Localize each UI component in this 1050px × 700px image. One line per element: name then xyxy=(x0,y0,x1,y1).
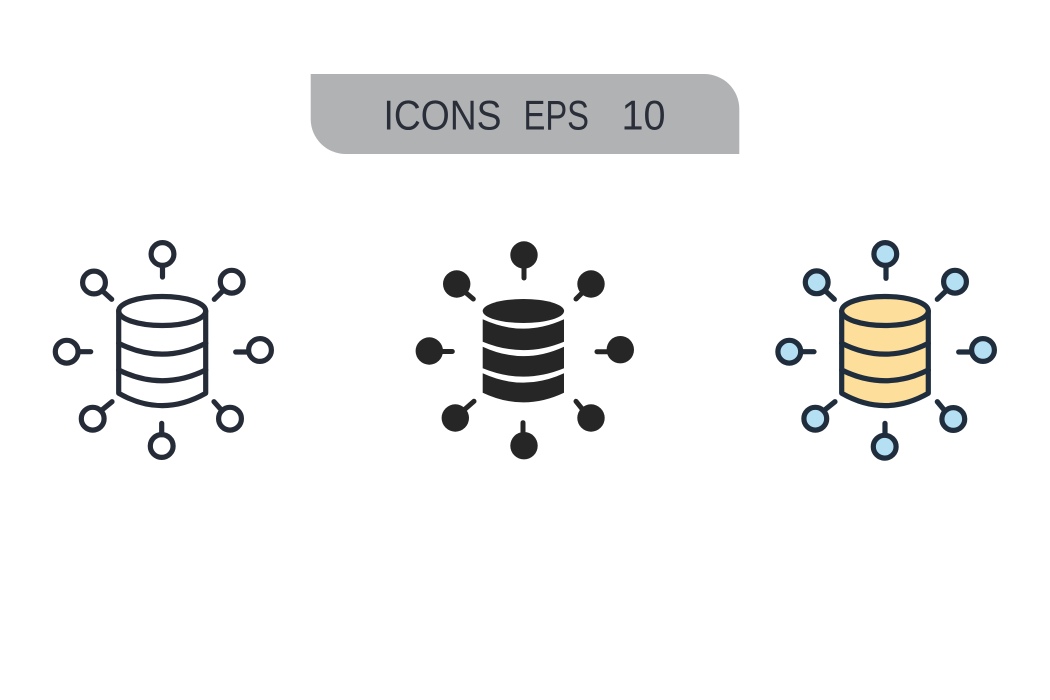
banner title xyxy=(384,92,666,138)
database cylinder solid xyxy=(483,299,564,402)
solid connector nodes xyxy=(416,241,634,459)
database cylinder outline xyxy=(119,296,206,406)
coloured connector nodes xyxy=(778,243,994,458)
icon: coloured database network xyxy=(778,243,994,458)
banner background xyxy=(311,74,739,154)
icon: solid database network xyxy=(416,241,634,459)
banner title: EPS xyxy=(524,92,589,138)
outline connector nodes xyxy=(55,243,271,457)
banner: icons eps 10 xyxy=(311,74,739,154)
database cylinder coloured xyxy=(842,296,928,406)
banner title: ICONS xyxy=(384,92,502,138)
banner title: 10 xyxy=(622,92,666,138)
icon: outline database network xyxy=(55,243,271,457)
